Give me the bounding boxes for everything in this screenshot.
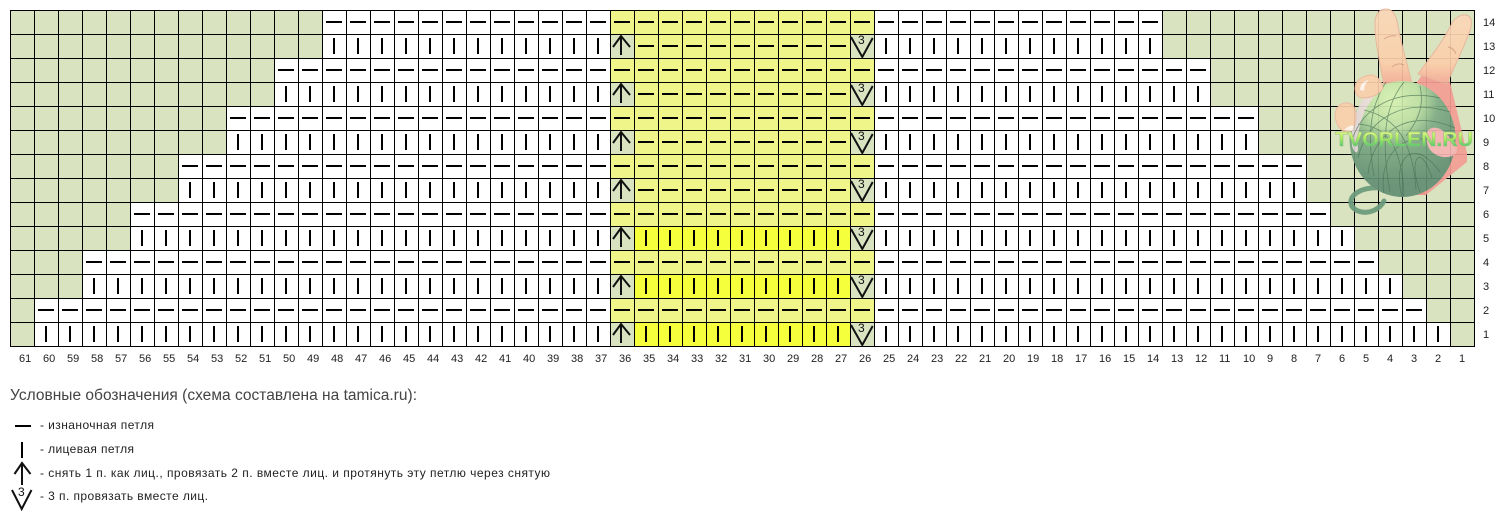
column numbers: 2 <box>1435 353 1441 365</box>
row numbers: 5 <box>1483 233 1489 245</box>
column numbers: 60 <box>43 353 55 365</box>
column numbers: 10 <box>1243 353 1255 365</box>
legend <box>12 418 550 509</box>
three-together stitches, column 26: 3 <box>858 321 865 335</box>
yarn tail <box>1351 188 1400 212</box>
row numbers: 9 <box>1483 137 1489 149</box>
column numbers: 36 <box>619 353 631 365</box>
column numbers: 4 <box>1387 353 1393 365</box>
column numbers: 34 <box>667 353 679 365</box>
three-together stitches, column 26: 3 <box>858 273 865 287</box>
ring finger <box>1355 75 1383 98</box>
column numbers: 44 <box>427 353 439 365</box>
row numbers: 6 <box>1483 209 1489 221</box>
column numbers: 50 <box>283 353 295 365</box>
legend item: slip stitch arrow <box>14 463 550 485</box>
yarn strands <box>1352 82 1455 196</box>
column numbers: 15 <box>1123 353 1135 365</box>
column numbers: 32 <box>715 353 727 365</box>
row numbers: 14 <box>1483 17 1495 29</box>
column numbers: 54 <box>187 353 199 365</box>
column numbers: 11 <box>1219 353 1230 365</box>
column numbers: 9 <box>1267 353 1273 365</box>
column numbers: 48 <box>331 353 343 365</box>
row numbers <box>1483 17 1495 341</box>
column numbers: 40 <box>523 353 535 365</box>
column numbers: 41 <box>499 353 511 365</box>
column numbers: 25 <box>883 353 895 365</box>
column numbers: 57 <box>115 353 127 365</box>
legend item: purl stitch: - изнаночная петля <box>40 418 154 432</box>
chart: knitting grid <box>10 10 1475 347</box>
column numbers: 21 <box>979 353 991 365</box>
column numbers: 37 <box>595 353 607 365</box>
column numbers: 51 <box>259 353 271 365</box>
column numbers: 39 <box>547 353 559 365</box>
column numbers: 22 <box>955 353 967 365</box>
column numbers: 27 <box>835 353 847 365</box>
legend item: three together: 3 <box>18 485 25 499</box>
finger creases <box>1384 36 1456 67</box>
palm <box>1400 64 1467 195</box>
column numbers: 12 <box>1195 353 1207 365</box>
column numbers: 7 <box>1315 353 1321 365</box>
row numbers: 12 <box>1483 65 1495 77</box>
row numbers: 7 <box>1483 185 1489 197</box>
column numbers: 52 <box>235 353 247 365</box>
column numbers: 26 <box>859 353 871 365</box>
column numbers: 28 <box>811 353 823 365</box>
column numbers: 43 <box>451 353 463 365</box>
white stitch area <box>34 10 1450 346</box>
three-together stitches, column 26: 3 <box>858 177 865 191</box>
column numbers: 45 <box>403 353 415 365</box>
column numbers: 14 <box>1147 353 1159 365</box>
thumb <box>1426 128 1457 157</box>
legend item: knit stitch: - лицевая петля <box>40 442 134 456</box>
row numbers: 2 <box>1483 305 1489 317</box>
column numbers <box>19 353 1465 365</box>
grid lines <box>10 10 1475 347</box>
column numbers: 3 <box>1411 353 1417 365</box>
arrow stitches, column 36 <box>613 36 630 343</box>
column numbers: 29 <box>787 353 799 365</box>
column numbers: 53 <box>211 353 223 365</box>
legend heading: Условные обозначения (схема составлена на tamica.ru): <box>10 387 417 404</box>
column numbers: 6 <box>1339 353 1345 365</box>
column numbers: 49 <box>307 353 319 365</box>
column numbers: 1 <box>1459 353 1465 365</box>
column numbers: 46 <box>379 353 391 365</box>
row numbers: 4 <box>1483 257 1489 269</box>
yellow centre panel <box>610 10 874 346</box>
knit stitches <box>45 46 1450 334</box>
row numbers: 8 <box>1483 161 1489 173</box>
lower hand rim <box>1358 168 1426 195</box>
column numbers: 13 <box>1171 353 1183 365</box>
fingernail highlights <box>1344 80 1369 131</box>
middle finger <box>1375 9 1412 86</box>
column numbers: 16 <box>1099 353 1111 365</box>
column numbers: 61 <box>19 353 31 365</box>
column numbers: 38 <box>571 353 583 365</box>
row numbers: 1 <box>1483 329 1489 341</box>
row numbers: 10 <box>1483 113 1495 125</box>
column numbers: 5 <box>1363 353 1369 365</box>
column numbers: 17 <box>1075 353 1087 365</box>
column numbers: 42 <box>475 353 487 365</box>
watermark text: TVORLEN.RU <box>1335 128 1473 151</box>
three-together stitches, column 26 <box>851 33 873 345</box>
column numbers: 18 <box>1051 353 1063 365</box>
three-together stitches, column 26: 3 <box>858 225 865 239</box>
column numbers: 30 <box>763 353 775 365</box>
legend item: slip stitch arrow: - снять 1 п. как лиц., провязать 2 п. вместе лиц. и протянуть эту петлю через снятую <box>40 466 550 480</box>
column numbers: 23 <box>931 353 943 365</box>
column numbers: 33 <box>691 353 703 365</box>
column numbers: 19 <box>1027 353 1039 365</box>
column numbers: 31 <box>739 353 751 365</box>
yarn ball <box>1350 81 1456 197</box>
three-together stitches, column 26: 3 <box>858 129 865 143</box>
column numbers: 58 <box>91 353 103 365</box>
column numbers: 8 <box>1291 353 1297 365</box>
index finger <box>1418 15 1471 84</box>
little finger <box>1335 103 1356 132</box>
three-together stitches, column 26: 3 <box>858 81 865 95</box>
row numbers: 11 <box>1483 89 1494 101</box>
row numbers: 13 <box>1483 41 1495 53</box>
three-together stitches, column 26: 3 <box>858 33 865 47</box>
column numbers: 59 <box>67 353 79 365</box>
column numbers: 55 <box>163 353 175 365</box>
legend item: three together <box>12 485 208 509</box>
column numbers: 20 <box>1003 353 1015 365</box>
purl stitches <box>38 22 1422 310</box>
left edge highlight <box>1352 88 1380 153</box>
chart background <box>10 10 1474 346</box>
watermark: hand holding yarn ball <box>1335 9 1473 212</box>
column numbers: 35 <box>643 353 655 365</box>
column numbers: 56 <box>139 353 151 365</box>
legend item: three together: - 3 п. провязать вместе лиц. <box>40 489 208 503</box>
column numbers: 47 <box>355 353 367 365</box>
column numbers: 24 <box>907 353 919 365</box>
row numbers: 3 <box>1483 281 1489 293</box>
